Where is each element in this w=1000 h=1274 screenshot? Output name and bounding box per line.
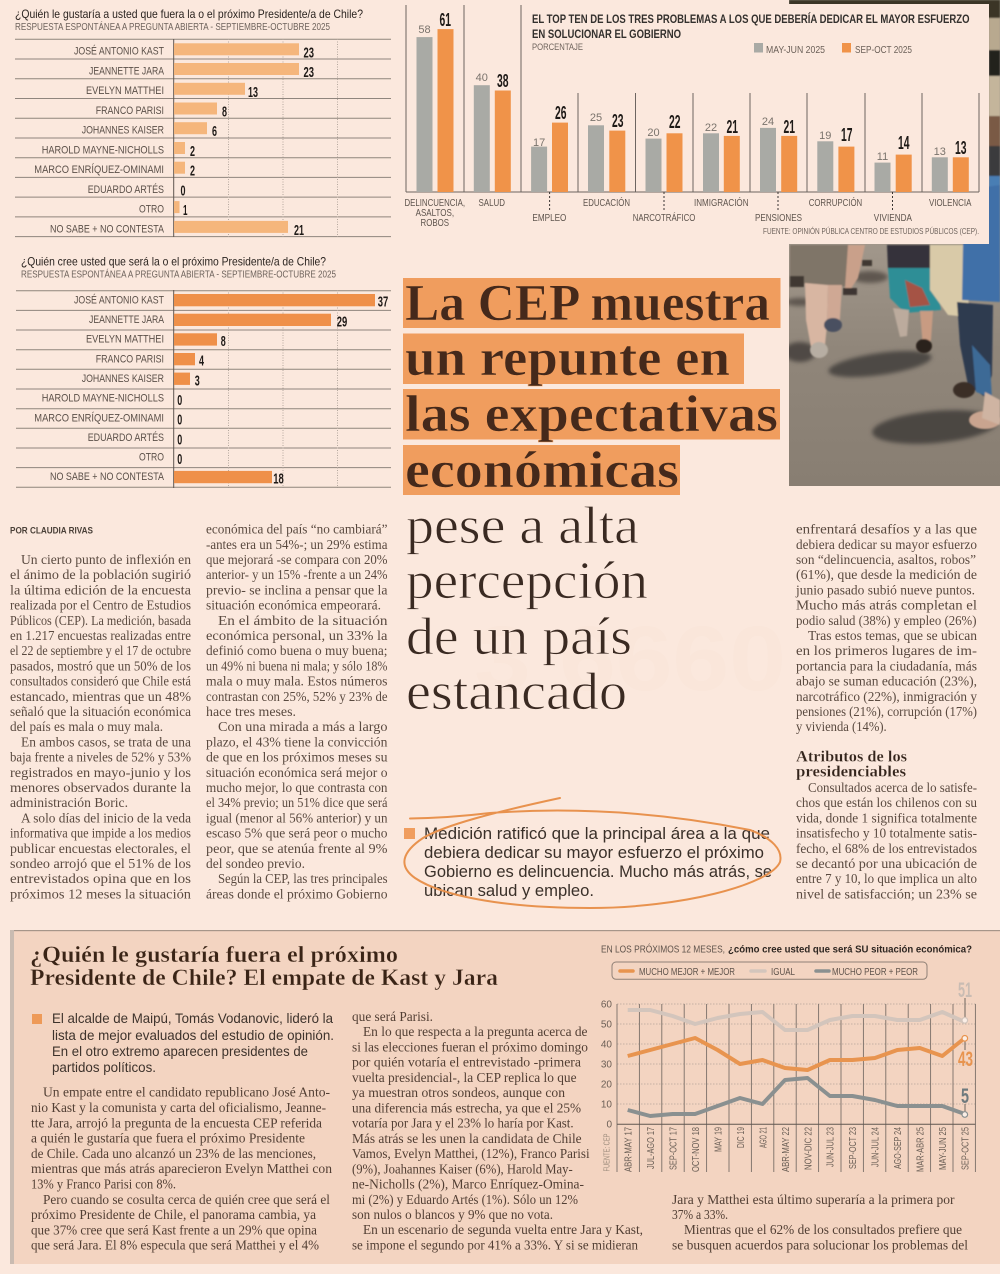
text column 1: registrados en mayo-junio y los (10, 765, 191, 780)
values (180, 44, 314, 239)
bars (174, 43, 299, 233)
text column 1: publicar encuestas electorales, el (10, 841, 191, 856)
text column 1: estancado, mientras que un 48% (10, 689, 191, 704)
text column 1: en 1.217 encuestas realizadas entre (10, 628, 191, 643)
chart title (532, 13, 970, 41)
category labels: VIOLENCIA (929, 197, 971, 209)
text column 2: económica del país “no cambiará” (206, 522, 388, 537)
values: 4 (199, 353, 204, 370)
text column 1: la última edición de la encuesta (10, 582, 191, 597)
text column 1: A solo días del inicio de la veda (21, 810, 191, 825)
headline (403, 275, 780, 499)
text column 1: próximos 12 meses la situación (10, 886, 191, 901)
text column 2: áreas donde el próximo Gobierno (206, 886, 388, 901)
legend: MUCHO MEJOR + MEJOR (639, 967, 735, 978)
x axis labels: NOV-DIC 22 (803, 1127, 814, 1170)
series: mejor (628, 1038, 965, 1070)
text column 2: peor, que se atenúa frente al 9% (206, 841, 388, 856)
text column 1: entrevistados opina que en los (10, 871, 191, 886)
callout text: Medición ratificó que la principal área a la que (424, 825, 770, 843)
text column 3: fecho, el 68% de los entrevistados (796, 841, 977, 856)
candidate labels: JOSÉ ANTONIO KAST (74, 293, 164, 306)
values: 23 (304, 44, 314, 61)
Sep-Oct values: 26 (555, 103, 566, 123)
hand-drawn ellipse (404, 798, 780, 908)
category labels: PENSIONES (755, 212, 802, 224)
body column A: 13% y Franco Parisi con 8%. (31, 1176, 176, 1192)
text column 3: podio salud (38%) y empleo (26%) (796, 613, 976, 629)
body column B: una diferencia más estrecha, ya que el 25% (352, 1100, 581, 1115)
text column 3: portancia para la ciudadanía, más (796, 658, 977, 673)
end markers and callout values: 5 (961, 1085, 969, 1108)
text column 2: económica personal, un 33% la (206, 628, 388, 643)
body column B: mi (2%) y Eduardo Artés (1%). Sólo un 12% (352, 1192, 578, 1207)
text column 3: pensiones (21%), corrupción (17%) (796, 704, 977, 720)
text column 3: Mucho más atrás completan el (796, 598, 977, 613)
text column 1: administración Boric. (10, 795, 128, 810)
x axis labels: JUN-JUL 23 (826, 1127, 837, 1167)
series: peor (628, 1078, 965, 1116)
body column A: a quién le gustaría que fuera el próximo Presidente (31, 1131, 305, 1146)
values: 0 (177, 392, 182, 409)
legend (612, 962, 927, 979)
y axis labels: 60 (601, 1000, 612, 1010)
body column A: que será Jara. El 8% especula que será Matthei y el 4% (31, 1238, 319, 1253)
values: 29 (337, 313, 347, 330)
body column B: que será Parisi. (352, 1009, 433, 1024)
text column 2: escaso 5% que será peor o mucho (206, 826, 388, 841)
category labels: CORRUPCIÓN (809, 196, 862, 209)
body column B: (9%), Joahannes Kaiser (6%), Harold May- (352, 1161, 573, 1176)
text column 2: hace tres meses. (206, 704, 296, 719)
panel: top ten problems chart (400, 4, 989, 244)
May-Jun values: 17 (533, 137, 545, 149)
values: 1 (183, 202, 188, 219)
values (177, 294, 388, 488)
body column B: votaría por Jara y el 23% lo haría por Kast. (352, 1116, 574, 1131)
Sep-Oct values: 21 (784, 117, 795, 137)
chart unit: PORCENTAJE (532, 42, 583, 53)
chart title: EN LOS PRÓXIMOS 12 MESES, (601, 942, 725, 956)
text column 1: menores observados durante la (10, 780, 191, 795)
bars (174, 294, 375, 483)
body column C (672, 1192, 968, 1252)
chart title: EN SOLUCIONAR EL GOBIERNO (532, 29, 681, 41)
candidate labels: JOHANNES KAISER (82, 373, 164, 385)
subheadline: de un país (406, 608, 632, 666)
values: 23 (304, 64, 314, 81)
legend: MUCHO PEOR + PEOR (832, 967, 918, 978)
candidate labels: FRANCO PARISI (96, 353, 164, 365)
panel: lower section (10, 930, 1000, 1264)
chart title (601, 942, 972, 956)
May-Jun values: 20 (647, 127, 660, 139)
values: 18 (273, 471, 284, 488)
x axis labels: SEP-OCT 17 (668, 1127, 679, 1170)
text column 1: el ánimo de la población sugirió (10, 567, 191, 582)
chart title: ¿Quién cree usted que será la o el próximo Presidente/a de Chile? (21, 254, 326, 268)
text column 2: contrastan con 25%, 52% y 23% de (206, 689, 388, 704)
values: 2 (190, 163, 195, 180)
candidate labels: NO SABE + NO CONTESTA (50, 223, 165, 235)
y axis labels: 50 (601, 1020, 612, 1030)
text column 3: abajo se suman educación (23%), (796, 674, 977, 690)
Sep-Oct values: 17 (841, 125, 852, 145)
May-Jun values: 24 (762, 116, 774, 128)
body column A: próximo Presidente de Chile, el panorama cambia, ya (31, 1207, 316, 1222)
text column 3: enfrentará desafíos y a las que (796, 522, 977, 537)
chart subtitle: RESPUESTA ESPONTÁNEA A PREGUNTA ABIERTA - SEPTIEMBRE-OCTUBRE 2025 (15, 20, 330, 33)
x axis labels: OCT-NOV 18 (691, 1127, 702, 1172)
chart subtitle: RESPUESTA ESPONTÁNEA A PREGUNTA ABIERTA - SEPTIEMBRE-OCTUBRE 2025 (21, 268, 336, 280)
y axis labels: 10 (601, 1100, 612, 1110)
headline: un repunte en (405, 330, 730, 387)
body column B: Vamos, Evelyn Matthei, (12%), Franco Parisi (352, 1146, 590, 1161)
text column 1: señaló que la situación económica (10, 704, 191, 719)
lead text: En el otro extremo aparecen presidentes de (52, 1043, 308, 1059)
x axis labels: JUN-JUL 24 (871, 1127, 882, 1167)
subheading: Atributos: Atributos de los (796, 749, 907, 766)
values: 3 (195, 372, 200, 389)
body column C: Jara y Matthei esta último superaría a la primera por (672, 1192, 955, 1207)
y axis labels: 40 (601, 1040, 612, 1050)
Sep-Oct values: 21 (726, 117, 738, 137)
lead text (52, 1010, 334, 1075)
line chart: situación económica (601, 942, 976, 1172)
candidate labels: MARCO ENRÍQUEZ-OMINAMI (34, 411, 164, 424)
values: 2 (190, 143, 195, 160)
lead text: lista de mejor evaluados del estudio de opinión. (52, 1027, 334, 1043)
text column 3: insatisfecho y 10 totalmente satis- (796, 826, 977, 841)
text column 2: -antes era un 54%-; un 29% estima (206, 537, 388, 552)
May-Jun values: 11 (877, 151, 888, 163)
values: 21 (294, 222, 304, 239)
x axis labels: ABR-MAY 17 (624, 1127, 634, 1172)
text column 2: mucho mejor, lo que contrasta con (206, 780, 388, 795)
category labels: NARCOTRÁFICO (633, 211, 695, 224)
candidate labels: EVELYN MATTHEI (86, 85, 164, 97)
text column 2: previo- se inclina a pensar que la (206, 582, 388, 597)
values: 0 (180, 182, 186, 199)
bar chart: ¿Quién le gustaría? (15, 7, 391, 239)
candidate labels: JEANNETTE JARA (89, 314, 165, 326)
callout text: ubican salud y empleo. (424, 882, 594, 900)
subheadline: estancado (406, 663, 627, 721)
values: 0 (177, 431, 182, 448)
candidate labels (34, 45, 165, 235)
Sep-Oct values (440, 10, 966, 158)
candidate labels: EDUARDO ARTÉS (88, 183, 164, 196)
lead text: El alcalde de Maipú, Tomás Vodanovic, lideró la (52, 1010, 333, 1026)
text column 2: igual (menor al 56% anterior) y un (206, 810, 388, 826)
candidate labels: NO SABE + NO CONTESTA (50, 471, 165, 483)
May-Jun values: 19 (819, 130, 831, 142)
x axis labels: DIC 19 (736, 1127, 747, 1148)
legend (754, 43, 912, 56)
headline: las expectativas (405, 386, 778, 443)
y axis labels: 20 (601, 1080, 612, 1090)
category labels: SALUD (478, 197, 505, 209)
x axis labels: SEP-OCT 25 (961, 1127, 972, 1170)
headline: La CEP muestra (405, 275, 770, 332)
text column 2: del sondeo previo. (206, 856, 305, 871)
values: 8 (221, 333, 226, 350)
body column A: que 37% cree que será Kast frente a un 29% que opina (31, 1222, 317, 1237)
bar chart: ¿Quién cree? (16, 254, 391, 488)
text column 2: definió como buena o muy buena; (206, 643, 388, 658)
text column 3: son “delincuencia, asaltos, robos” (796, 552, 976, 567)
text column 2: Con una mirada a más a largo (218, 719, 388, 734)
body column B: ya muestran otros sondeos, aunque con (352, 1085, 565, 1100)
body column C: Mientras que el 62% de los consultados prefiere que (684, 1222, 962, 1237)
subheadline: pese a alta (406, 497, 639, 555)
callout (404, 798, 780, 908)
text column 2: En el ámbito de la situación (218, 613, 388, 628)
callout text (424, 825, 772, 900)
x axis labels: AGO-SEP 24 (893, 1127, 904, 1169)
text column 2: anterior- y un 15% -frente a un 24% (206, 567, 388, 582)
body column A: nio Kast y la comunista y carta del oficialismo, Jeanne- (31, 1100, 326, 1115)
text column 3: vida, donde 1 significa totalmente (796, 810, 977, 825)
y axis labels (601, 1000, 612, 1130)
May-Jun values (418, 24, 946, 163)
text column 3: se decantó por una ubicación de (796, 856, 977, 871)
section heading (30, 942, 498, 990)
subheading: Atributos: presidenciables (796, 764, 906, 781)
body column C: 37% a 33%. (672, 1207, 728, 1222)
text column 3: entre 7 y 10, lo que implica un alto (796, 871, 977, 886)
text column 3: Tras estos temas, que se ubican (808, 628, 977, 643)
category labels (404, 196, 971, 229)
section heading: ¿Quién le gustaría fuera el próximo (30, 942, 398, 967)
end markers and callout values: 43 (958, 1048, 973, 1071)
text column 2: que mejorará -se compara con 20% (206, 552, 388, 567)
values: 6 (212, 123, 217, 140)
body column A: tte Jara, arrojó la pregunta de la encuesta CEP referida (31, 1115, 322, 1130)
x axis labels: MAY-JUN 25 (938, 1127, 949, 1170)
body column A: mientras que más atrás aparecieron Evelyn Matthei con (31, 1161, 332, 1176)
legend: IGUAL (771, 967, 795, 978)
bars Sep-Oct 2025 (438, 29, 969, 192)
values: 0 (177, 412, 182, 429)
legend: MAY-JUN 2025 (766, 44, 825, 56)
x axis labels: ABR-MAY 22 (781, 1127, 792, 1172)
candidate labels: EDUARDO ARTÉS (88, 431, 164, 444)
text column 2: Según la CEP, las tres principales (218, 871, 388, 886)
May-Jun values: 13 (934, 146, 946, 158)
chart source: FUENTE: CEP (602, 1134, 612, 1172)
text column 1: realizada por el Centro de Estudios (10, 598, 191, 613)
y axis labels: 30 (601, 1060, 612, 1070)
subheadline (406, 497, 648, 721)
category labels: ROBOS (420, 217, 449, 229)
text column 1: del país es mala o muy mala. (10, 719, 163, 734)
values: 37 (378, 294, 388, 311)
text column 3: en los primeros lugares de im- (796, 643, 978, 658)
watermark digits: 3 6660 (474, 608, 786, 710)
body column A (31, 1085, 332, 1253)
text column 2: situación económica empeorará. (206, 598, 381, 613)
body column B (352, 1009, 643, 1252)
May-Jun values: 58 (418, 24, 431, 36)
callout text: Gobierno es delincuencia. Mucho más atrás, se (424, 863, 772, 881)
text column 2: situación económica será mejor o (206, 765, 388, 780)
text column 2: de que en los próximos meses su (206, 750, 388, 765)
text column 1: el 22 de septiembre y el 17 de octubre (10, 643, 191, 658)
section heading: Presidente de Chile? El empate de Kast y Jara (30, 965, 498, 990)
subheadline: percepción (406, 552, 648, 610)
text column 1: sondeo arrojó que el 51% de los (10, 856, 191, 871)
candidate labels: JOHANNES KAISER (82, 125, 164, 137)
text column 3 (795, 522, 978, 901)
headline: económicas (405, 442, 679, 499)
subheading: Atributos (796, 749, 907, 781)
series: igual (628, 1010, 965, 1030)
body column B: ne-Nicholls (2%), Marco Enríquez-Omina- (352, 1176, 584, 1192)
text column 1: consultados consideró que Chile está (10, 674, 191, 689)
x axis labels: AGO 21 (758, 1127, 769, 1148)
category labels: DELINCUENCIA, (404, 197, 465, 209)
text column 3: narcotráfico (22%), inmigración y (796, 689, 977, 705)
text column 1: informativa que impide a los medios (10, 826, 191, 841)
candidate labels: MARCO ENRÍQUEZ-OMINAMI (34, 163, 164, 176)
text column 2 (206, 522, 388, 901)
Sep-Oct values: 61 (440, 10, 451, 30)
values: 0 (177, 451, 182, 468)
text column 2: el 34% previo; un 51% dice que será (206, 795, 388, 810)
category labels: INMIGRACIÓN (694, 196, 748, 209)
category labels: VIVIENDA (874, 212, 912, 224)
values: 8 (222, 104, 227, 120)
text column 3: junio pasado subió nueve puntos. (795, 582, 975, 597)
text column 2: mala o muy mala. Estos números (206, 674, 388, 689)
x axis labels (624, 1127, 972, 1172)
candidate labels: HAROLD MAYNE-NICHOLLS (42, 393, 164, 405)
byline: POR CLAUDIA RIVAS (10, 526, 93, 536)
body column B: por quién votaría el entrevistado -primera (352, 1055, 581, 1070)
body column B: son nulos o blancos y 9% que no vota. (352, 1207, 553, 1222)
text column 1 (10, 552, 191, 901)
bullet square (404, 828, 415, 839)
lead text: partidos políticos. (52, 1059, 156, 1075)
candidate labels: FRANCO PARISI (96, 105, 164, 117)
May-Jun values: 25 (590, 112, 602, 124)
body column A: Un empate entre el candidato republicano José Anto- (43, 1085, 330, 1100)
May-Jun values: 22 (705, 122, 717, 134)
text column 1: En ambos casos, se trata de una (21, 734, 191, 749)
Sep-Oct values: 23 (612, 111, 624, 131)
values: 13 (248, 84, 258, 101)
category labels: EDUCACIÓN (583, 196, 630, 209)
text column 1: Un cierto punto de inflexión en (21, 552, 191, 567)
Sep-Oct values: 13 (955, 138, 966, 158)
text column 3: y vivienda (14%). (796, 719, 887, 735)
May-Jun values: 40 (476, 72, 488, 84)
text column 3: Consultados acerca de lo satisfe- (808, 780, 977, 795)
callout text: debiera dedicar su mayor esfuerzo el próximo (424, 844, 764, 862)
end markers and callout values (958, 979, 973, 1117)
candidate labels: JOSÉ ANTONIO KAST (74, 45, 164, 58)
category labels: EMPLEO (532, 212, 566, 224)
x axis labels: MAY 19 (713, 1127, 724, 1152)
body column B: se impone el segundo por 41% a 33%. Y si se midieran (352, 1238, 638, 1252)
candidate labels: HAROLD MAYNE-NICHOLLS (42, 144, 164, 156)
x axis labels: JUL-AGO 17 (646, 1127, 657, 1169)
candidate labels (34, 293, 165, 483)
body column A: Pero cuando se cosulta cerca de quién cree que será el (43, 1192, 330, 1207)
end markers and callout values: 51 (958, 979, 972, 1002)
bullet square (32, 1014, 42, 1024)
body column C: se busquen acuerdos para solucionar los problemas del (672, 1238, 968, 1252)
text column 3: debiera dedicar su mayor esfuerzo (796, 537, 977, 552)
x axis labels: MAR-ABR 25 (916, 1127, 927, 1172)
legend: SEP-OCT 2025 (855, 44, 912, 56)
text column 3: (61%), que desde la medición de (796, 567, 977, 583)
body column B: si las elecciones fueran el próximo domingo (352, 1040, 588, 1054)
category labels: ASALTOS, (416, 207, 454, 219)
text column 1: pasados, mostró que un 50% de los (10, 658, 191, 673)
candidate labels: OTRO (139, 452, 164, 464)
Sep-Oct values: 14 (898, 133, 910, 153)
body column B: En lo que respecta a la pregunta acerca de (363, 1024, 588, 1039)
candidate labels: OTRO (139, 204, 164, 216)
text column 3: nivel de satisfacción; un 23% se (796, 886, 977, 901)
bars May-Jun 2025 (416, 37, 948, 192)
body column B: En un escenario de segunda vuelta entre Jara y Kast, (363, 1222, 643, 1237)
text column 3: chos que están los chilenos con su (796, 795, 977, 810)
candidate labels: EVELYN MATTHEI (86, 334, 164, 346)
text column 1: baja frente a niveles de 52% y 53% (10, 750, 191, 765)
chart title: ¿cómo cree usted que será SU situación económica? (728, 944, 972, 956)
y axis labels: 0 (606, 1120, 612, 1130)
body column A: de Chile. Cada uno alcanzó un 23% de las menciones, (31, 1146, 316, 1161)
candidate labels: JEANNETTE JARA (89, 65, 165, 77)
body column B: vuelta presidencial-, la CEP replica lo que (352, 1070, 577, 1085)
photo: pedestrians walking (784, 0, 1000, 486)
text column 1: Públicos (CEP). La medición, basada (10, 613, 191, 629)
body column B: Más atrás se les unen la candidata de Chile (352, 1131, 582, 1146)
chart title: ¿Quién le gustaría a usted que fuera la o el próximo Presidente/a de Chile? (15, 7, 363, 21)
Sep-Oct values: 22 (669, 112, 680, 132)
text column 2: un 49% ni buena ni mala; y sólo 18% (206, 658, 388, 673)
text column 2: plazo, el 43% tiene la convicción (206, 734, 388, 749)
Sep-Oct values: 38 (497, 71, 508, 91)
x axis labels: SEP-OCT 23 (848, 1127, 859, 1169)
